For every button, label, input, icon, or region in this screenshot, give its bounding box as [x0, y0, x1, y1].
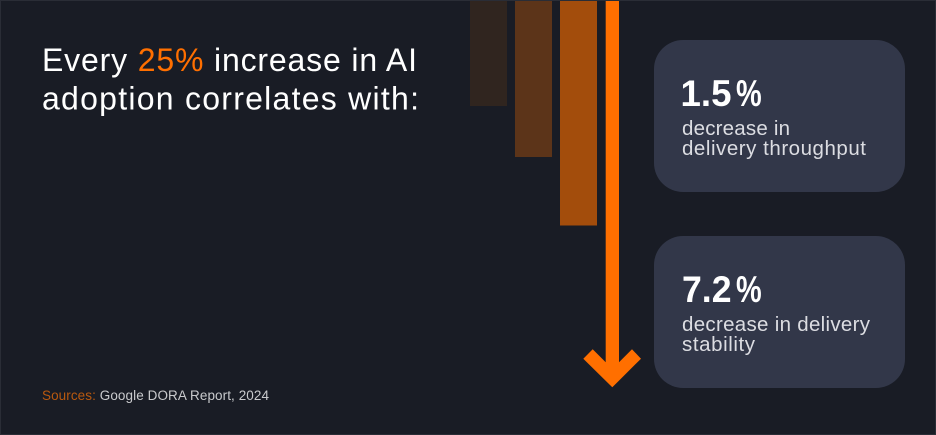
bar: faint [470, 1, 507, 106]
description: delivery stability [682, 313, 871, 356]
title [42, 42, 419, 116]
description: delivery stability: decrease in delivery [682, 313, 871, 336]
description: delivery throughput: delivery throughput [682, 137, 866, 160]
stat: 1.5% [680, 72, 762, 115]
title: Every 25% increase in AI [42, 42, 417, 78]
bar: medium [515, 1, 552, 157]
arrow: downward [583, 1, 641, 387]
description: delivery stability: stability [682, 333, 756, 356]
stat: 7.2%: 7.2 [682, 268, 732, 310]
source note: Sources: Google DORA Report, 2024 [42, 388, 269, 403]
stat: 1.5%: 1.5 [680, 72, 732, 114]
stat: 7.2% [682, 268, 762, 311]
description: delivery throughput [682, 117, 866, 160]
title: adoption correlates with: [42, 80, 419, 116]
stat: 1.5%: % [736, 74, 762, 115]
stat: 7.2%: % [736, 270, 762, 311]
bar: strong [560, 1, 597, 226]
card: delivery stability [654, 236, 905, 388]
description: delivery throughput: decrease in [682, 117, 790, 140]
card: delivery throughput [654, 40, 905, 192]
